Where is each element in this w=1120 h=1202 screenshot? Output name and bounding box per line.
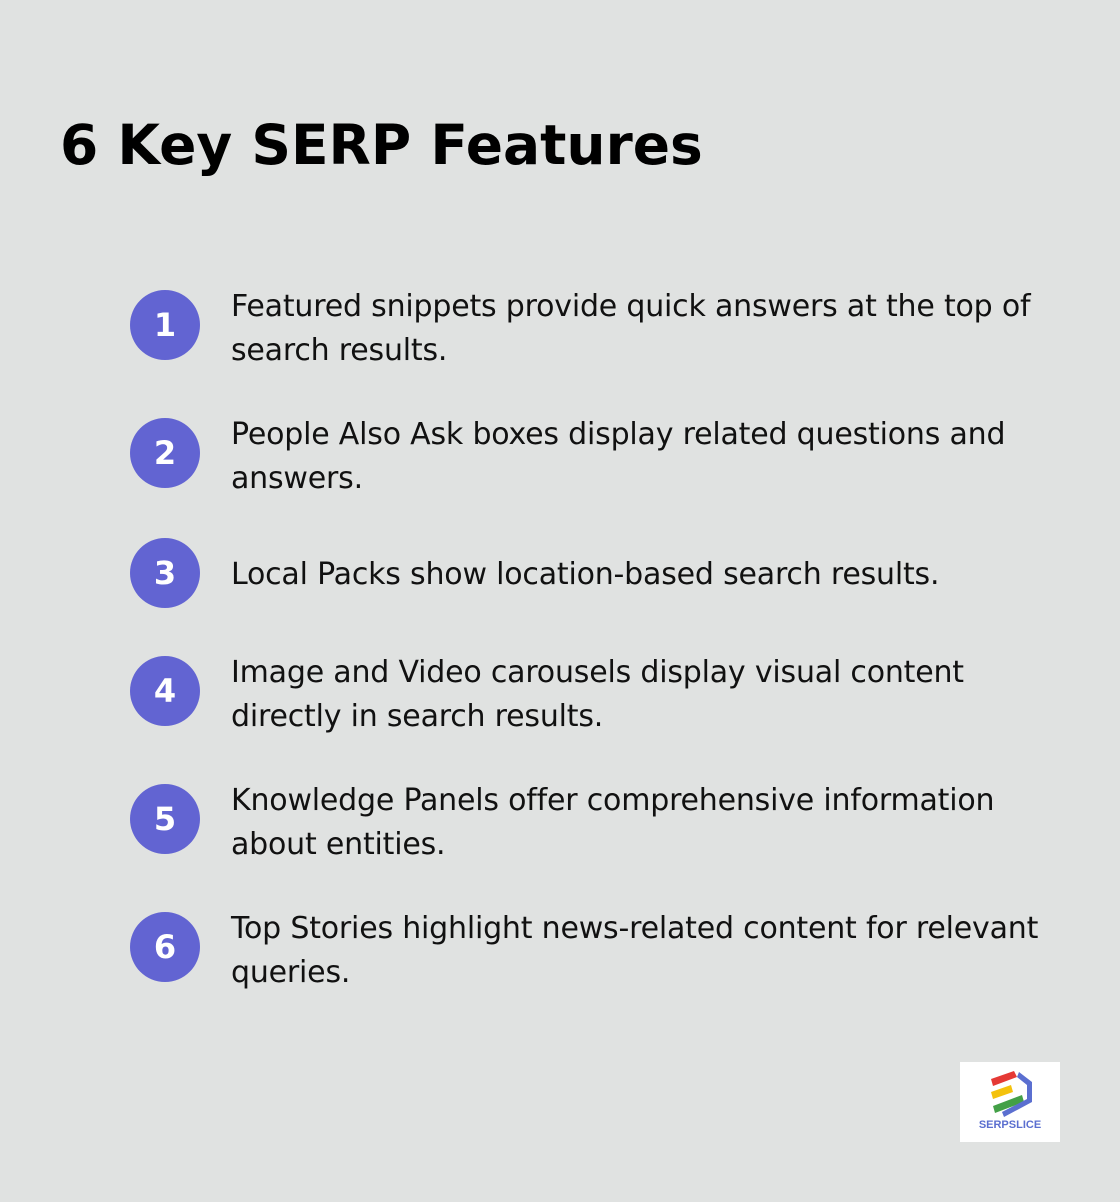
item 6: Top Stories highlight news-related content for relevant [231,911,1038,946]
item 1: search results. [231,333,447,368]
item 2: 2 [154,434,176,472]
item 1: Featured snippets provide quick answers at the top of [231,289,1030,324]
item 2: People Also Ask boxes display related questions and [231,417,1005,452]
logo: SERPSLICE [979,1119,1041,1131]
item 2: answers. [231,461,363,496]
item 3: Local Packs show location-based search results. [231,557,939,592]
item 4: 4 [154,672,176,710]
item 5 [130,783,994,862]
item 3: 3 [154,554,176,592]
item 5: about entities. [231,827,445,862]
item 1 [130,289,1032,368]
item 5: 5 [154,800,176,838]
item 2 [130,417,1005,496]
item 4 [130,655,964,734]
item 5: Knowledge Panels offer comprehensive information [231,783,994,818]
item 6 [130,911,1038,990]
logo [960,1062,1060,1142]
item 3 [130,538,939,608]
title: 6 Key SERP Features [60,113,703,177]
item 4: directly in search results. [231,699,603,734]
item 4: Image and Video carousels display visual content [231,655,964,690]
item 6: queries. [231,955,350,990]
item 1: 1 [154,306,176,344]
item 6: 6 [154,928,176,966]
